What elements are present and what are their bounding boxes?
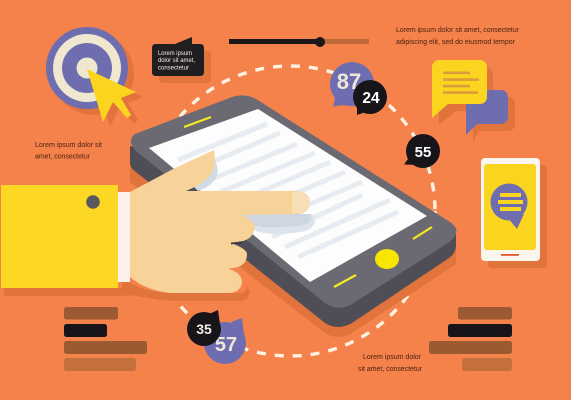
number bubble: 55 [404, 134, 440, 168]
icon: phone with message [481, 158, 547, 268]
callout: black speech bubble: dolor sit amet, [158, 58, 195, 64]
callout: black speech bubble [152, 37, 211, 83]
text block: top right: Lorem ipsum dolor sit amet, consectetur [396, 25, 519, 34]
tablet [130, 95, 456, 337]
slider [229, 37, 369, 47]
number bubble: 55: 55 [415, 144, 431, 161]
number bubble: 35: 35 [196, 321, 212, 337]
text block: top right [396, 25, 519, 46]
callout: black speech bubble: Lorem ipsum [158, 51, 192, 57]
bar group: left [64, 307, 147, 371]
number bubble: 57 [204, 318, 246, 364]
tablet screen [149, 109, 427, 282]
hand with sleeve [1, 150, 315, 301]
text block: left [35, 140, 103, 160]
number bubble: 24: 24 [362, 90, 380, 107]
text block: bottom [358, 352, 422, 373]
text block: left: Lorem ipsum dolor sit [35, 140, 103, 149]
hand shape [130, 150, 310, 293]
text block: bottom: Lorem ipsum dolor [363, 352, 421, 361]
sleeve [1, 185, 130, 288]
text block: left: amet, consectetur [35, 152, 90, 160]
callout: black speech bubble: consectetur [158, 66, 189, 72]
number bubble: 35 [187, 310, 221, 346]
bar group: right [429, 307, 512, 371]
number bubble: 87 [330, 62, 374, 107]
number bubble: 24 [353, 80, 387, 115]
text block: top right: adipiscing elit, sed do eiusmod tempor [396, 37, 515, 46]
icon: chat bubbles [432, 60, 515, 142]
number bubble: 87: 87 [337, 69, 361, 94]
icon: target with cursor [46, 27, 143, 127]
number bubble: 57: 57 [215, 334, 237, 356]
text block: bottom: sit amet, consectetur [358, 364, 422, 373]
